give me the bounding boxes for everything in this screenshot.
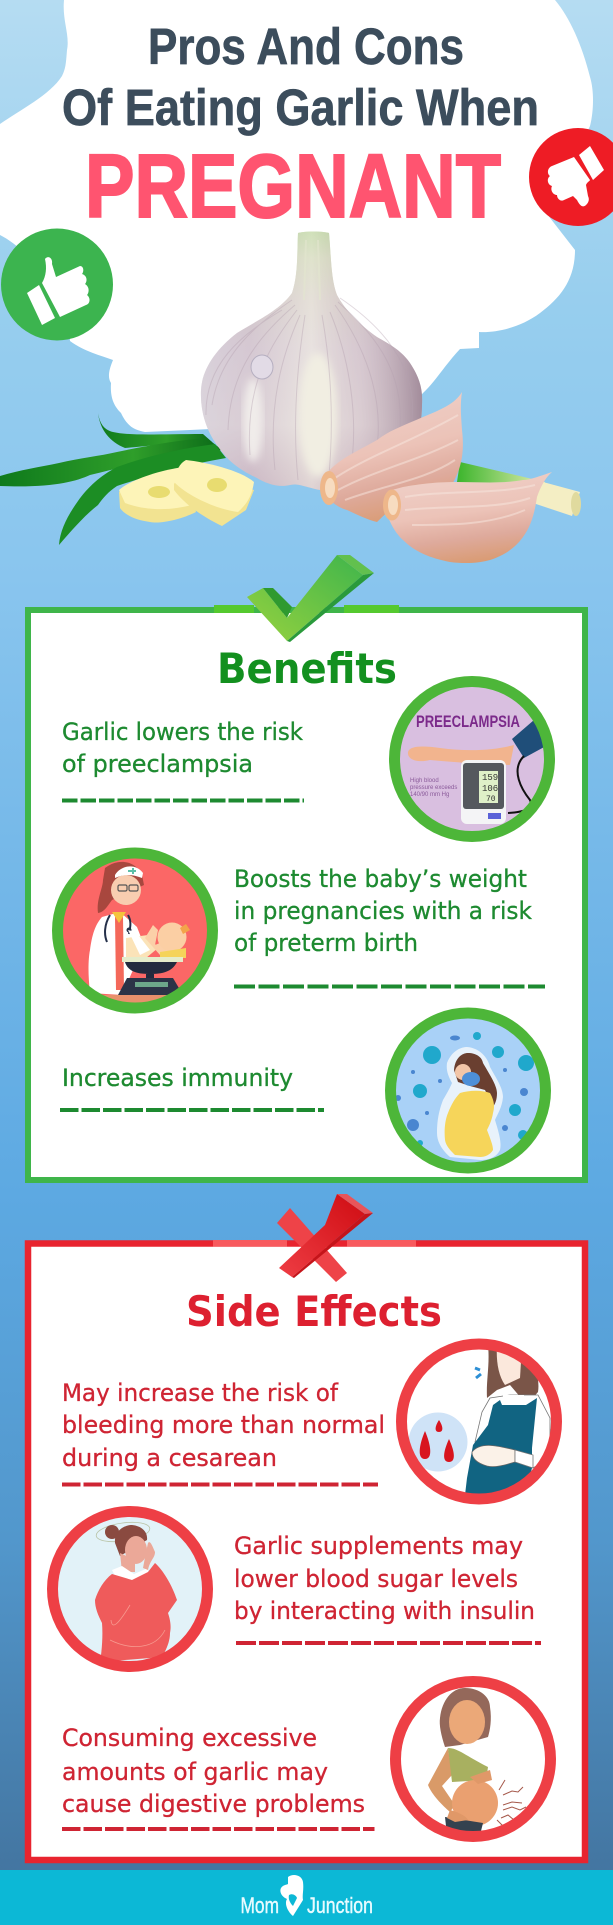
benefit 2 text: in pregnancies with a risk [234, 897, 532, 925]
side effect 3 text: cause digestive problems [62, 1790, 365, 1818]
side effect 3 text: amounts of garlic may [62, 1758, 328, 1786]
illustration: dizzy woman [52, 1511, 208, 1667]
heading: benefits: Benefits [217, 644, 397, 693]
benefit 1 text [62, 718, 304, 800]
benefit 1 text: Garlic lowers the risk [62, 718, 303, 746]
illustration: digestive problems [395, 1681, 551, 1837]
illustration: bleeding [401, 1340, 557, 1500]
benefit 3 text: Increases immunity [62, 1064, 293, 1092]
illustration: preeclampsia: 106 [482, 784, 498, 794]
side effect 2 text: lower blood sugar levels [234, 1565, 518, 1593]
illustration: preeclampsia: 70 [486, 795, 496, 804]
illustration: nurse weighing baby [57, 852, 213, 1020]
heading: side effects: Side Effects [186, 1287, 442, 1336]
title [62, 18, 539, 237]
side effect 3 text [62, 1724, 374, 1829]
panel: benefits [28, 555, 585, 1180]
side effect 1 text [62, 1379, 385, 1484]
side effect 1 text: bleeding more than normal [62, 1411, 385, 1439]
footer bar [0, 1870, 613, 1925]
benefit 2 text: of preterm birth [234, 929, 418, 957]
title: PREGNANT [85, 137, 501, 237]
title: Pros And Cons [148, 18, 464, 75]
illustration: preeclampsia: High blood [410, 778, 439, 784]
side effect 2 text: Garlic supplements may [234, 1532, 523, 1560]
cloves [320, 392, 552, 563]
panel: side effects [28, 1194, 585, 1860]
icon: thumbs down [529, 128, 613, 226]
logo: MomJunction: Junction [307, 1893, 373, 1918]
side effect 2 text [234, 1532, 541, 1643]
logo: MomJunction: Mom [240, 1893, 279, 1918]
side effect 3 text: Consuming excessive [62, 1724, 317, 1752]
leaves [0, 413, 226, 545]
illustration: preeclampsia: 159 [482, 773, 498, 783]
title: Of Eating Garlic When [62, 79, 539, 136]
benefit 2 text [234, 865, 545, 986]
bulb [201, 232, 422, 490]
illustration: preeclampsia: PREECLAMPSIA [416, 712, 520, 731]
side effect 1 text: during a cesarean [62, 1444, 277, 1472]
white cloud behind title [0, 0, 593, 432]
icon: thumbs up [1, 228, 113, 340]
icon: cross mark [277, 1194, 373, 1282]
illustration: preeclampsia: pressure exceeds [410, 785, 457, 791]
benefit 2 text: Boosts the baby’s weight [234, 865, 527, 893]
illustration: garlic [0, 232, 581, 563]
illustration: pregnant woman immunity [390, 1012, 546, 1168]
illustration: preeclampsia [394, 681, 550, 837]
side effect 1 text: May increase the risk of [62, 1379, 339, 1407]
benefit 1 text: of preeclampsia [62, 750, 253, 778]
logo: MomJunction [240, 1875, 373, 1918]
side effect 2 text: by interacting with insulin [234, 1597, 535, 1625]
garlic slices [119, 460, 254, 526]
stalk [457, 462, 581, 516]
illustration: preeclampsia: 140/90 mm Hg [410, 792, 449, 798]
icon: check mark [247, 555, 374, 642]
